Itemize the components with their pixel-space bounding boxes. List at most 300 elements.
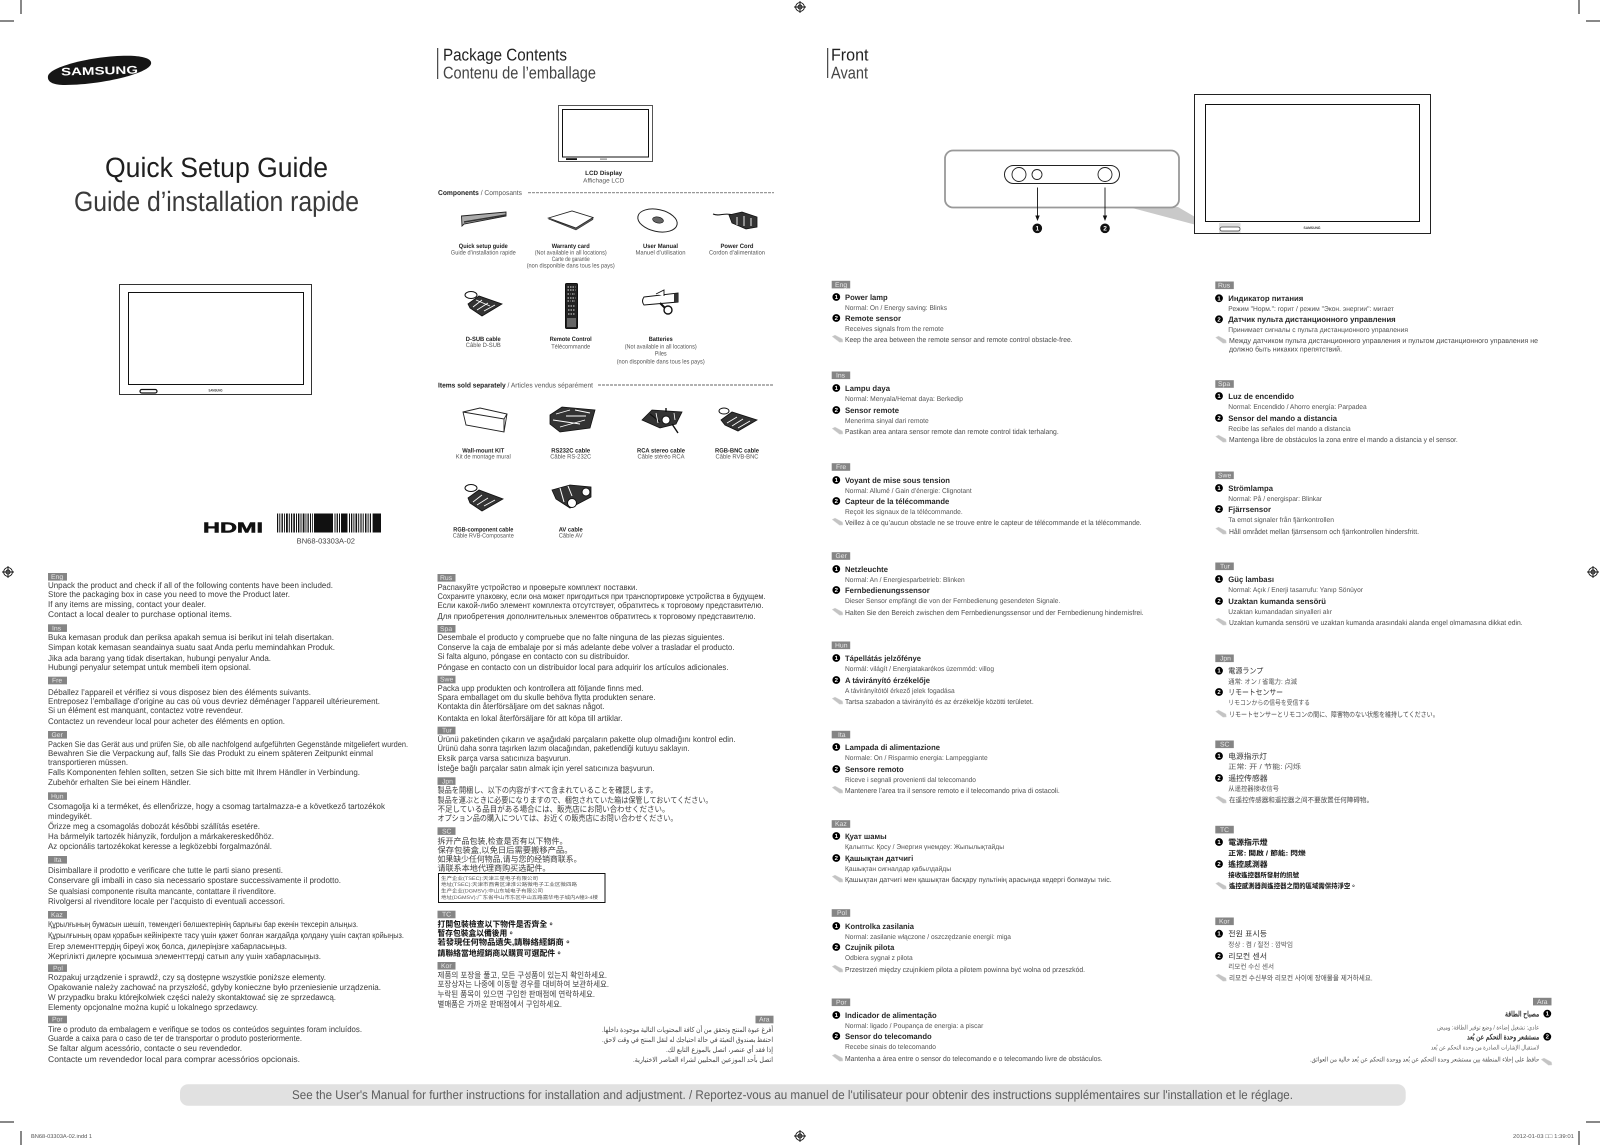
Hungarian description: 2 — [835, 677, 839, 684]
Hungarian instructions: mindegyikét. — [48, 811, 92, 821]
Arabic description: مصباح الطاقة — [1505, 1010, 1539, 1018]
Turkish description: Uzaktan kumanda sensörü — [1228, 597, 1326, 606]
Kazakh description: Қашықтан сигналдар қабылдайды — [845, 865, 951, 873]
Arabic description: 2 — [1546, 1034, 1550, 1041]
Swedish instructions — [438, 676, 656, 723]
Hungarian instructions: Csomagolja ki a terméket, és ellenőrizze, hogy a csomag tartalmazza-e a következő tartozékok — [48, 801, 386, 811]
label: RGB-component cable — [453, 526, 514, 540]
label: AV cable: Câble AV — [559, 532, 584, 540]
Traditional Chinese instructions: 打開包裝檢查以下物件是否齊全。 — [438, 919, 555, 929]
label: power cord: Power Cord — [720, 243, 754, 250]
Japanese description: 1 — [1217, 668, 1221, 675]
German description: 1 — [835, 566, 839, 573]
Swedish instructions: Packa upp produkten och kontrollera att följande finns med. — [438, 683, 644, 693]
Russian instructions: Rus — [440, 575, 453, 582]
Simplified Chinese description: 2 — [1217, 775, 1221, 782]
Korean instructions: 별매품은 가까운 판매점에서 구입하세요. — [438, 999, 562, 1009]
Portuguese description: 1 — [835, 1012, 839, 1019]
English description: Normal: On / Energy saving: Blinks — [845, 305, 948, 312]
Traditional Chinese instructions: 暫存包裝盒以備後用。 — [438, 928, 515, 938]
Swedish description: 1 — [1217, 485, 1221, 492]
English instructions: If any items are missing, contact your dealer. — [48, 599, 206, 609]
English description: 1 — [835, 294, 839, 301]
label: warranty card: Carte de garantie — [552, 256, 590, 263]
icon: warranty card — [548, 211, 593, 230]
Traditional Chinese instructions: TC — [442, 912, 451, 919]
Japanese instructions: Jpn — [442, 778, 453, 785]
Italian description — [832, 731, 1060, 795]
French description: Veillez à ce qu’aucun obstacle ne se trouve entre le capteur de télécommande et la télécommande. — [845, 518, 1142, 527]
English description: Power lamp — [845, 293, 888, 302]
illustration: large display: SAMSUNG — [1304, 226, 1321, 230]
part number: BN68-03303A-02 — [297, 536, 355, 546]
label: D-SUB cable — [466, 336, 501, 349]
Russian description: 1 — [1217, 295, 1221, 302]
Hungarian description: A távirányítótól érkező jelek fogadása — [845, 687, 955, 695]
Spanish description: 2 — [1217, 415, 1221, 422]
Polish description: 1 — [835, 923, 839, 930]
French instructions: Entreposez l’emballage d’origine au cas où vous devriez déménager l’appareil ultérieurement. — [48, 696, 380, 706]
Kazakh description: Қалыпты: Қосу / Энергия үнемдеу: Жыпылықтайды — [845, 843, 1004, 851]
Korean description: 리모컨 수신부와 리모컨 사이에 장애물을 제거하세요. — [1229, 974, 1373, 982]
Italian instructions: Se qualsiasi componente risulta mancante, contattare il rivenditore. — [48, 886, 276, 896]
Korean description: 리모컨 센서 — [1228, 952, 1267, 961]
Italian description: Lampada di alimentazione — [845, 743, 941, 752]
registration mark: left — [2, 566, 14, 578]
Korean description: 전원 표시등 — [1228, 930, 1267, 938]
label: AV cable — [559, 526, 584, 540]
Traditional Chinese description: 1 — [1217, 839, 1221, 846]
Swedish description: Fjärrsensor — [1228, 505, 1271, 514]
Italian description: Mantenere l’area tra il sensore remoto e il telecomando priva di ostacoli. — [845, 786, 1060, 795]
Japanese description: 電源ランプ — [1228, 666, 1263, 676]
German description: Ger — [836, 553, 848, 560]
manufacturer address box: 地址(TSEC):天津市西青区津淮公路微电子工业区微四路 — [441, 881, 577, 888]
German description: Halten Sie den Bereich zwischen dem Fernbedienungssensor und der Fernbedienung hindernisfrei. — [845, 608, 1144, 617]
Turkish description: 1 — [1217, 576, 1221, 583]
Hungarian description: Normál: világít / Energiatakarékos üzemmód: villog — [845, 665, 994, 673]
Turkish description: 2 — [1217, 598, 1221, 605]
heading: front — [827, 46, 869, 82]
Indonesian description: Ins — [836, 372, 846, 380]
icon: Samsung logo: SAMSUNG — [61, 64, 138, 78]
icon: wall-mount kit box — [463, 408, 507, 432]
icon: Samsung logo — [48, 56, 151, 85]
Portuguese instructions — [48, 1016, 362, 1064]
Arabic instructions — [602, 1016, 774, 1064]
print slug: date: 2012-01-03 □□ 1:39:01 — [1513, 1134, 1574, 1140]
Kazakh description: Қуат шамы — [845, 832, 887, 841]
Japanese instructions: 製品を開梱し、以下の内容がすべて含まれていることを確認します。 — [438, 785, 658, 795]
Portuguese description: Mantenha a área entre o sensor do telecomando e o telecomando livre de obstáculos. — [845, 1054, 1103, 1063]
label: RS232C cable: Câble RS-232C — [550, 454, 592, 460]
label: RGB-BNC cable: Câble RVB-BNC — [716, 454, 759, 460]
Turkish description: Uzaktan kumandadan sinyalleri alır — [1228, 609, 1333, 616]
Korean description: 정상 : 켬 / 절전 : 깜박임 — [1228, 941, 1293, 949]
Portuguese description — [832, 998, 1103, 1063]
Russian description: 2 — [1217, 316, 1221, 323]
Swedish description: Håll området mellan fjärrsensorn och fjärrkontrollen hindersfritt. — [1229, 527, 1419, 536]
Arabic description: Ara — [1537, 999, 1548, 1006]
German description: Normal: An / Energiesparbetrieb: Blinken — [845, 577, 965, 584]
title: Quick Setup Guide — [105, 152, 328, 183]
panel: cover — [48, 56, 381, 546]
Spanish instructions: Desembale el producto y compruebe que no falte ninguna de las piezas siguientes. — [438, 632, 724, 642]
label: power cord — [709, 243, 766, 256]
Russian description: Индикатор питания — [1228, 294, 1304, 303]
French instructions: Déballez l’appareil et vérifiez si vous disposez bien des éléments suivants. — [48, 687, 311, 697]
Indonesian description: Menerima sinyal dari remote — [845, 418, 929, 425]
label: RGB-BNC cable — [715, 448, 760, 460]
marker 2 — [1100, 224, 1110, 233]
English description: Keep the area between the remote sensor and remote control obstacle-free. — [845, 335, 1073, 344]
label: power cord: Cordon d’alimentation — [709, 250, 766, 256]
Turkish instructions: Eksik parça varsa satıcınıza başvurun. — [438, 753, 570, 763]
Polish description: 2 — [835, 944, 839, 951]
registration mark: bottom — [794, 1130, 806, 1142]
Traditional Chinese description: 電源指示燈 — [1228, 838, 1268, 847]
German description: Netzleuchte — [845, 565, 889, 574]
panel: control descriptions, column 2 — [1215, 282, 1552, 1065]
French description: Normal: Allumé / Gain d’énergie: Clignotant — [845, 487, 972, 495]
Italian instructions: Rivolgersi al rivenditore locale per l’acquisto di eventuali accessori. — [48, 896, 285, 906]
Korean instructions — [438, 962, 609, 1009]
Indonesian instructions: Simpan kotak kemasan seandainya suatu saat Anda perlu memindahkan Produk. — [48, 642, 335, 652]
Traditional Chinese description: 正常: 開啟 / 節能: 閃爍 — [1228, 849, 1306, 857]
label: RCA stereo cable — [637, 448, 686, 460]
Kazakh instructions: Kaz — [51, 912, 63, 919]
Hungarian description: Hun — [835, 642, 848, 650]
icon: RGB-component cable — [465, 484, 503, 511]
icon: RS232C cable — [550, 407, 595, 432]
label: warranty card: (Not available in all locations) — [535, 250, 607, 256]
label: RGB-BNC cable: RGB-BNC cable — [715, 448, 760, 454]
Polish description — [832, 909, 1085, 974]
Portuguese description: Recebe sinais do telecomando — [845, 1044, 936, 1051]
Kazakh instructions: Жергілікті дилерге қосымша элементтерді сатып алу үшін хабарласыңыз. — [48, 951, 321, 961]
Simplified Chinese description: 从遥控器接收信号 — [1228, 785, 1279, 793]
Turkish description — [1215, 562, 1523, 627]
Italian instructions: Conservare gli imballi in caso sia necessario spostare successivamente il prodotto. — [48, 875, 341, 885]
label: RS232C cable: RS232C cable — [551, 448, 591, 454]
Simplified Chinese description: 在遥控传感器和遥控器之间不要放置任何障碍物。 — [1229, 796, 1373, 804]
Indonesian description: Lampu daya — [845, 384, 891, 393]
Simplified Chinese description: 电源指示灯 — [1228, 752, 1267, 761]
Polish description: Normal: zasilanie włączone / oszczędzanie energii: miga — [845, 934, 1011, 941]
Spanish description: Mantenga libre de obstáculos la zona entre el mando a distancia y el sensor. — [1229, 435, 1458, 444]
label: D-SUB cable: D-SUB cable — [466, 336, 501, 343]
Swedish description: Ta emot signaler från fjärrkontrollen — [1228, 516, 1334, 524]
Swedish description: Swe — [1218, 472, 1231, 480]
footer banner — [180, 1084, 1406, 1106]
Russian instructions — [438, 574, 766, 621]
Turkish instructions — [438, 727, 736, 773]
Italian instructions: Disimballare il prodotto e verificare che tutte le parti siano presenti. — [48, 865, 283, 875]
arrow: power lamp — [1035, 188, 1040, 221]
Polish instructions: Opakowanie należy zachować na przyszłość, gdyby konieczne było przeniesienie urządzenia. — [48, 982, 381, 992]
Polish description: Przestrzeń między czujnikiem pilota a pilotem powinna być wolna od przeszkód. — [845, 965, 1085, 974]
Korean instructions: Kor — [441, 963, 452, 970]
Swedish description: Strömlampa — [1228, 484, 1274, 493]
Arabic description: حافظ على إخلاء المنطقة بين مستشعر وحدة التحكم عن بُعد ووحدة التحكم عن بُعد خالية من العوائق.‏ — [1310, 1056, 1539, 1064]
icon: HDMI logo: HDMI — [203, 521, 263, 537]
Russian description: Режим "Норм.": горит / режим "Экон. энергии": мигает — [1228, 306, 1395, 313]
Spanish instructions: Conserve la caja de embalaje por si más adelante debe volver a trasladar el producto. — [438, 642, 734, 652]
Russian instructions: Сохраните упаковку, если она может пригодиться при транспортировке устройства в будущем. — [438, 591, 766, 601]
Italian description: Sensore remoto — [845, 765, 904, 774]
panel: control descriptions, column 1 — [832, 281, 1144, 1063]
English description: 2 — [835, 315, 839, 322]
heading: items sold separately: Items sold separately / Articles vendus séparément — [438, 382, 593, 390]
Italian description: Ita — [838, 732, 846, 739]
Swedish instructions: Spara emballaget om du skulle behöva flytta produkten senare. — [438, 692, 656, 702]
Korean instructions: 포장상자는 나중에 이동할 경우를 대비하여 보관하세요. — [438, 979, 609, 989]
label: batteries: (Not available in all locations) — [625, 344, 697, 350]
Indonesian instructions — [48, 624, 335, 672]
Japanese instructions: 不足している品目がある場合には、販売店にお問い合わせください。 — [438, 804, 670, 814]
Simplified Chinese description: 遥控传感器 — [1228, 774, 1268, 783]
Japanese instructions: 製品を運ぶときに必要になりますので、梱包されていた箱は保管しておいてください。 — [438, 795, 712, 805]
German description — [832, 552, 1144, 617]
Traditional Chinese description — [1215, 826, 1357, 890]
French instructions: Contactez un revendeur local pour acheter des éléments en option. — [48, 716, 285, 726]
marker 2: 2 — [1103, 226, 1107, 232]
Portuguese description: Normal: ligado / Poupança de energia: a piscar — [845, 1023, 984, 1030]
English instructions — [48, 573, 333, 619]
Hungarian instructions: Őrizze meg a csomagolás dobozát későbbi szállítás esetére. — [48, 821, 260, 831]
manufacturer address box: 生产企业(DGMSV):中山东城电子有限公司 — [441, 888, 543, 894]
Simplified Chinese instructions — [438, 827, 582, 873]
Korean instructions: 제품의 포장을 풀고, 모든 구성품이 있는지 확인하세요. — [438, 970, 607, 980]
Polish description: Odbiera sygnał z pilota — [845, 955, 913, 962]
Indonesian instructions: Ins — [52, 625, 62, 632]
Spanish instructions — [438, 625, 734, 672]
Indonesian description — [832, 372, 1059, 436]
label: AV cable: AV cable — [559, 526, 583, 534]
label: user manual: User Manual — [643, 243, 678, 250]
label: wall-mount kit: Kit de montage mural — [456, 454, 511, 460]
Traditional Chinese description: 2 — [1217, 861, 1221, 868]
Indonesian instructions: Jika ada barang yang tidak disertakan, hubungi penyalur Anda. — [48, 653, 271, 663]
Hungarian instructions: Az opcionális tartozékokat keresse a legközebbi forgalmazónál. — [48, 841, 272, 851]
Japanese description: Jpn — [1220, 656, 1231, 662]
label: quick setup guide: Guide d’installation rapide — [451, 250, 516, 256]
Turkish description: Tur — [1220, 564, 1231, 570]
heading: package contents — [437, 46, 596, 82]
Spanish description: Recibe las señales del mando a distancia — [1228, 426, 1351, 433]
Arabic description: لاستقبال الإشارات الصادرة من وحدة التحكم عن بُعد — [1431, 1044, 1539, 1052]
marker 1 — [1032, 224, 1042, 233]
Russian description: Между датчиком пульта дистанционного управления и пультом дистанционного управления не — [1229, 336, 1538, 345]
label: warranty card: Warranty card — [552, 243, 590, 250]
illustration: display front — [120, 284, 312, 394]
Spanish description: 1 — [1217, 393, 1221, 400]
Japanese description: リモートセンサーとリモコンの間に、障害物のない状態を維持してください。 — [1229, 710, 1439, 719]
illustration: LCD display — [558, 106, 652, 162]
panel: unpacking instructions, column 2 — [438, 574, 774, 1064]
registration mark: right — [1587, 566, 1599, 578]
Hungarian description: Tápellátás jelzőfénye — [845, 654, 922, 663]
Japanese description: リモートセンサー — [1228, 688, 1283, 697]
Traditional Chinese description: TC — [1220, 827, 1229, 834]
Spanish description: Spa — [1218, 381, 1230, 388]
English instructions: Eng — [51, 574, 63, 581]
Polish description: Kontrolka zasilania — [845, 922, 915, 931]
Arabic instructions: إذا فقد أي عنصر، اتصل بالموزع التابع لك.‏ — [666, 1045, 773, 1054]
English instructions: Unpack the product and check if all of the following contents have been included. — [48, 580, 333, 590]
Hungarian instructions: Ha bármelyik tartozék hiányzik, forduljon a márkakereskedőhöz. — [48, 831, 274, 841]
Swedish instructions: Kontakta din återförsäljare om det saknas något. — [438, 701, 604, 711]
Kazakh description: Қашықтан датчигі мен қашықтан басқару пультінің арасында кедергі болмауы тиіс. — [845, 875, 1112, 884]
Russian description — [1215, 282, 1538, 354]
Italian description: Normale: On / Risparmio energia: Lampeggiante — [845, 755, 988, 762]
Polish instructions: Elementy opcjonalne można kupić u lokalnego sprzedawcy. — [48, 1002, 258, 1012]
Russian instructions: Распакуйте устройство и проверьте комплект поставки. — [438, 582, 638, 592]
label: wall-mount kit: Wall-mount KIT — [462, 448, 505, 454]
registration mark: top — [794, 1, 806, 13]
panel: package contents — [437, 46, 774, 540]
Polish instructions — [48, 964, 381, 1012]
label: RCA stereo cable: Câble stéréo RCA — [638, 454, 685, 460]
Spanish instructions: Póngase en contacto con un distribuidor local para adquirir los artículos adicionales. — [438, 662, 728, 672]
label: remote control: Remote Control — [550, 336, 592, 343]
Indonesian description: Normal: Menyala/Hemat daya: Berkedip — [845, 396, 963, 403]
Kazakh instructions: Егер элементтердің біреуі жоқ болса, дилеріңізге хабарласыңыз. — [48, 941, 287, 951]
Turkish description: Normal: Açık / Enerji tasarrufu: Yanıp Sönüyor — [1228, 587, 1364, 594]
illustration: large display — [1194, 94, 1430, 234]
Japanese description: 2 — [1217, 689, 1221, 696]
Russian instructions: Для приобретения дополнительных элементов обратитесь к торговому представителю. — [438, 611, 756, 621]
manufacturer address box: 生产企业(TSEC):天津三星电子有限公司 — [441, 875, 538, 882]
heading: package contents: Contenu de l’emballage — [443, 64, 596, 82]
Indonesian instructions: Buka kemasan produk dan periksa apakah semua isi berikut ini telah disertakan. — [48, 632, 334, 642]
label: batteries: (non disponible dans tous les pays) — [617, 358, 705, 366]
Simplified Chinese description: 1 — [1217, 753, 1221, 760]
icon: RGB-BNC cable — [719, 408, 757, 431]
French instructions: Fre — [52, 678, 62, 685]
icon: remote control — [566, 284, 578, 328]
Swedish description: 2 — [1217, 506, 1221, 513]
Arabic instructions: احتفظ بصندوق التعبئة في حالة احتياجك له لنقل المنتج في وقت لاحق.‏ — [602, 1036, 773, 1044]
Korean description: 1 — [1217, 931, 1221, 938]
label: remote control — [550, 336, 592, 350]
arrow: remote sensor — [1103, 188, 1107, 221]
Turkish instructions: Ürünü daha sonra taşırken lazım olacağından, paketlendiği kutuyu saklayın. — [438, 743, 690, 753]
Kazakh description: 1 — [835, 833, 839, 840]
icon: user manual disc — [636, 206, 679, 235]
label: RGB-component cable: Câble RVB-Composante — [453, 532, 514, 540]
Traditional Chinese description: 接收遙控器所發射的訊號 — [1228, 871, 1299, 879]
Polish description: Pol — [837, 910, 847, 917]
Portuguese instructions: Por — [52, 1017, 63, 1024]
German description: Fernbedienungssensor — [845, 586, 930, 595]
Arabic instructions: اتصل بأحد الموزعين المحليين لشراء العناصر الاختيارية.‏ — [633, 1054, 773, 1064]
Italian instructions — [48, 856, 341, 906]
label: LCD display: Affichage LCD — [583, 178, 625, 184]
Italian description: Riceve i segnali provenienti dal telecomando — [845, 777, 976, 784]
German instructions: Bewahren Sie die Verpackung auf, falls Sie das Produkt zu einem späteren Zeitpunkt einmal — [48, 748, 373, 758]
label: batteries: Piles — [655, 350, 667, 358]
Japanese description — [1215, 654, 1439, 719]
Hungarian description — [832, 642, 1034, 706]
label: warranty card — [527, 243, 615, 270]
Spanish description: Sensor del mando a distancia — [1228, 414, 1338, 423]
English description: Remote sensor — [845, 314, 901, 323]
Russian instructions: Если какой-либо элемент комплекта отсутствует, обратитесь к торговому представителю. — [438, 600, 764, 610]
Indonesian instructions: Hubungi penyalur setempat untuk membeli item opsional. — [48, 662, 251, 672]
English description — [832, 281, 1073, 344]
Indonesian description: 1 — [835, 385, 839, 392]
icon: AV cable — [552, 485, 591, 508]
Simplified Chinese description: SC — [1220, 742, 1230, 748]
Korean description: Kor — [1219, 918, 1230, 926]
Hungarian description: A távirányító érzékelője — [845, 676, 931, 685]
label: batteries — [617, 336, 705, 366]
Korean description — [1215, 918, 1373, 982]
Kazakh description — [832, 820, 1112, 884]
English instructions: Store the packaging box in case you need to move the Product later. — [48, 589, 290, 599]
label: user manual — [636, 243, 686, 256]
Japanese instructions: オプション品の購入については、お近くの販売店にお問い合わせください。 — [438, 813, 678, 823]
label: LCD display — [583, 170, 625, 184]
Polish description: Czujnik pilota — [845, 943, 895, 952]
Russian description: Принимает сигналы с пульта дистанционного управления — [1228, 327, 1408, 334]
label: quick setup guide: Quick setup guide — [459, 243, 508, 250]
Hungarian instructions — [48, 792, 386, 851]
German instructions: Zubehör erhalten Sie bei einem Händler. — [48, 777, 191, 787]
Arabic instructions: أفرغ عبوة المنتج وتحقق من أن كافة المحتويات التالية موجودة داخلها.‏ — [602, 1025, 773, 1034]
Kazakh instructions: Құрылғының бумасын шешіп, төмендегі бөлшектерінің барлығы бар екенін тексеріп алыңыз. — [48, 919, 358, 929]
Kazakh description: Kaz — [835, 821, 847, 828]
Traditional Chinese instructions: 請聯絡當地經銷商以購買可選配件。 — [438, 948, 563, 958]
French instructions: Si un élément est manquant, contactez votre revendeur. — [48, 705, 243, 715]
Traditional Chinese instructions — [438, 911, 572, 958]
label: remote control: Télécommande — [551, 344, 591, 350]
Korean instructions: 누락된 품목이 있으면 구입한 판매점에 연락하세요. — [438, 989, 595, 999]
Portuguese instructions: Se faltar algum acessório, contacte o seu revendedor. — [48, 1043, 242, 1053]
callout: sensor close-up — [945, 150, 1179, 208]
Kazakh instructions — [48, 911, 404, 961]
Hungarian instructions: Hun — [51, 793, 64, 800]
manufacturer address box — [438, 874, 605, 902]
Arabic description: 1 — [1546, 1011, 1550, 1018]
German instructions — [48, 731, 408, 787]
Simplified Chinese instructions: 保存包装盒,以免日后需要搬移产品。 — [438, 845, 572, 855]
Spanish description: Luz de encendido — [1228, 392, 1294, 401]
German description: 2 — [835, 587, 839, 594]
Simplified Chinese description: 正常: 开 / 节能: 闪烁 — [1228, 763, 1301, 771]
Portuguese description: Indicador de alimentação — [845, 1011, 937, 1020]
label: RS232C cable — [550, 448, 592, 460]
German instructions: Ger — [52, 732, 64, 739]
label: RGB-component cable: RGB-component cable — [453, 526, 514, 534]
icon: quick setup guide — [462, 212, 506, 226]
Simplified Chinese description — [1215, 740, 1373, 804]
German instructions: Packen Sie das Gerät aus und prüfen Sie, ob alle nachfolgend aufgeführten Gegenstände mitgeliefert wurden. — [48, 739, 408, 749]
Italian description: 2 — [835, 766, 839, 773]
subtitle: Guide d’installation rapide — [74, 186, 359, 217]
Arabic instructions: Ara — [759, 1017, 770, 1024]
Hungarian description: 1 — [835, 655, 839, 662]
French description: 2 — [835, 498, 839, 505]
German instructions: Falls Komponenten fehlen sollten, setzen Sie sich bitte mit Ihrem Händler in Verbindung. — [48, 767, 360, 777]
Korean description: 리모컨 수신 센서 — [1228, 963, 1274, 971]
Hungarian description: Tartsa szabadon a távirányító és az érzékelője közötti területet. — [845, 697, 1034, 706]
Portuguese description: Sensor do telecomando — [845, 1032, 932, 1041]
Indonesian description: Pastikan area antara sensor remote dan remote control tidak terhalang. — [845, 427, 1059, 436]
Swedish description: Normal: På / energispar: Blinkar — [1228, 495, 1323, 503]
label: batteries: Batteries — [649, 336, 673, 343]
